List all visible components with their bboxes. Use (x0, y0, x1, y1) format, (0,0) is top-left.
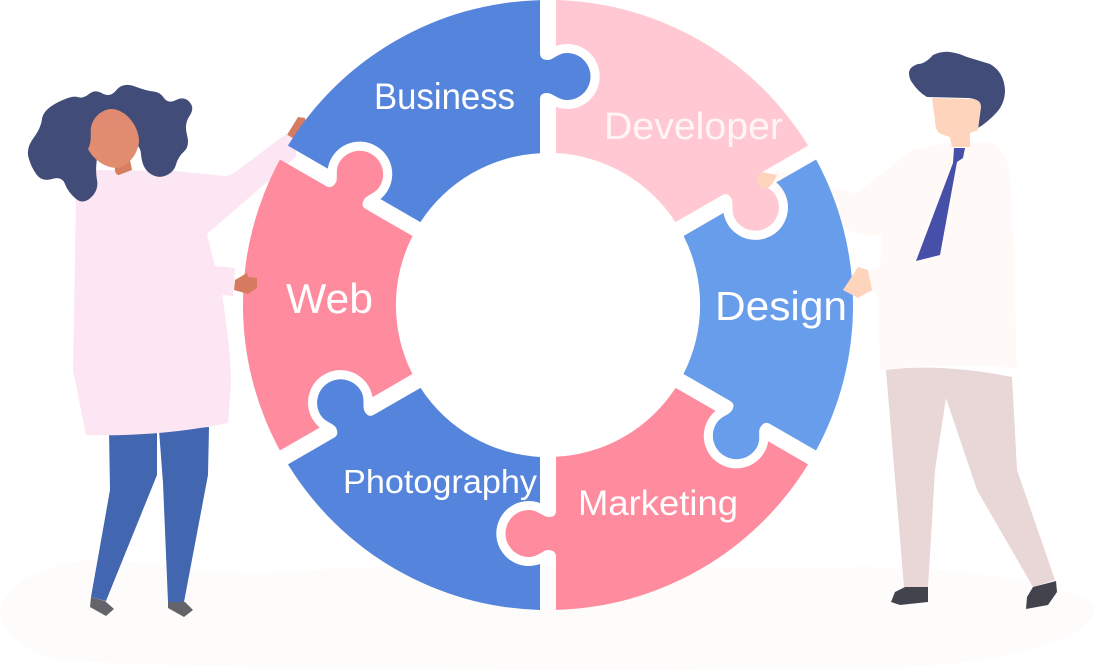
woman hair (28, 85, 192, 202)
label: Business: Business (374, 76, 515, 117)
segment: Design (599, 121, 942, 494)
ground shadow (0, 560, 1095, 670)
man shoes (891, 581, 1057, 609)
segment: Marketing (506, 388, 808, 610)
label: Marketing: Marketing (578, 484, 738, 523)
label: Web: Web (286, 275, 373, 322)
woman upper hand (287, 117, 310, 150)
man pants (886, 368, 1055, 587)
man lower hand (843, 267, 872, 298)
segment: Web (154, 116, 497, 489)
label: Photography: Photography (343, 463, 538, 500)
woman neck (114, 160, 132, 175)
man face and neck (932, 98, 981, 147)
woman face (88, 109, 139, 168)
woman dress (73, 134, 296, 435)
segment: Business (288, 0, 590, 222)
woman lower hand (234, 273, 257, 294)
segment: Developer (490, 0, 833, 300)
figure: woman (28, 85, 310, 617)
man tie (916, 148, 965, 261)
man shirt (775, 142, 1017, 370)
puzzle wheel (154, 0, 942, 670)
man hair (909, 52, 1005, 128)
label: Developer: Developer (604, 106, 783, 148)
segment: Photography (263, 310, 606, 670)
woman legs (91, 427, 209, 602)
woman shoes (90, 597, 193, 617)
man upper hand (757, 172, 777, 189)
label: Design: Design (715, 283, 847, 329)
figure: man body (775, 52, 1057, 609)
